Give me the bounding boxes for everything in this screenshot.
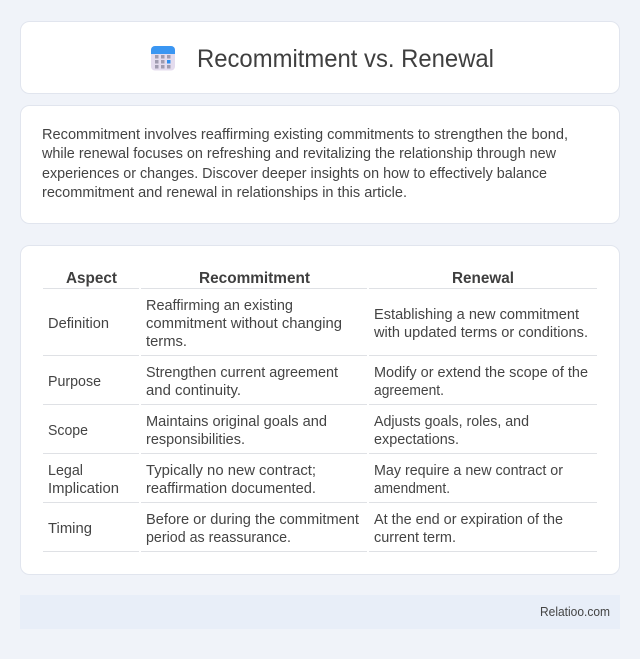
row: scope: responsibilities. <box>146 432 245 448</box>
row: timing: current term. <box>374 530 456 546</box>
row: definition: with updated terms or conditions. <box>373 325 588 341</box>
icon: calendar <box>151 46 175 70</box>
intro text: recommitment and renewal in relationships in this article. <box>42 184 407 201</box>
table header: Aspect <box>66 270 118 287</box>
row: scope: Scope <box>48 423 88 439</box>
row: purpose: Modify or extend the scope of the <box>374 365 588 381</box>
row: legal implication: May require a new contract or <box>374 463 563 479</box>
footer bar <box>20 595 620 629</box>
row: legal implication: Legal <box>48 463 83 479</box>
row: legal implication <box>48 463 563 497</box>
title: Recommitment vs. Renewal <box>197 45 494 73</box>
row: legal implication: Typically no new contract; <box>146 463 316 479</box>
table header: Renewal <box>452 270 514 287</box>
header card <box>20 22 620 94</box>
row: scope <box>48 414 529 448</box>
row: legal implication: amendment. <box>374 481 450 497</box>
row: timing: At the end or expiration of the <box>374 512 563 528</box>
table panel <box>20 246 620 574</box>
row: purpose <box>48 365 588 399</box>
table header <box>66 270 514 287</box>
intro text: experiences or changes. Discover deeper insights on how to effectively balance <box>42 165 547 182</box>
row: scope: Maintains original goals and <box>146 414 327 430</box>
row: definition: terms. <box>146 334 187 350</box>
table header: Recommitment <box>199 270 311 287</box>
row: definition: Reaffirming an existing <box>146 298 293 314</box>
intro panel <box>20 106 620 224</box>
row: legal implication: reaffirmation documented. <box>146 481 316 497</box>
row: timing: period as reassurance. <box>146 530 291 546</box>
row: purpose: Purpose <box>48 374 101 390</box>
row: timing: Timing <box>48 521 92 537</box>
row: definition: Establishing a new commitment <box>374 307 579 323</box>
row: purpose: Strengthen current agreement <box>146 365 338 381</box>
row: definition <box>48 298 588 350</box>
row: legal implication: Implication <box>48 481 119 497</box>
row: timing: Before or during the commitment <box>146 512 359 528</box>
row: scope: Adjusts goals, roles, and <box>374 414 529 430</box>
row: definition: commitment without changing <box>146 316 342 332</box>
row: purpose: agreement. <box>374 383 444 399</box>
intro text: Recommitment involves reaffirming existing commitments to strengthen the bond, <box>42 126 568 143</box>
footer credit: Relatioo.com <box>540 605 610 619</box>
row: purpose: and continuity. <box>146 383 241 399</box>
intro text: while renewal focuses on refreshing and revitalizing the relationship through new <box>41 145 556 162</box>
row: scope: expectations. <box>374 432 459 448</box>
intro text <box>41 126 568 201</box>
row: definition: Definition <box>48 316 109 332</box>
row: timing <box>48 512 563 546</box>
